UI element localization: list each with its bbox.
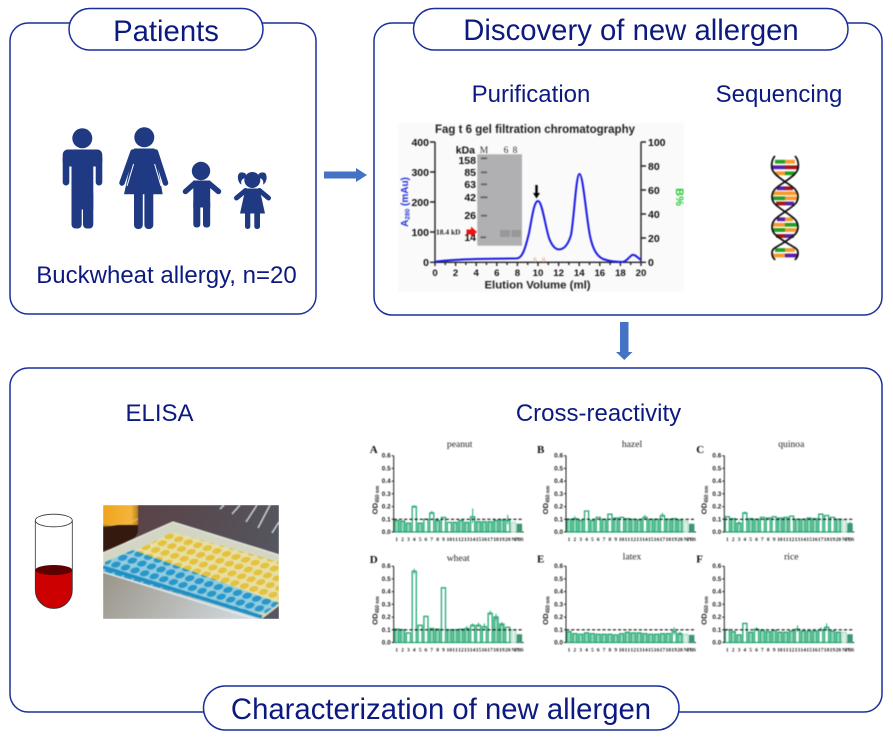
chart: E latex: 0.6 [554, 563, 563, 570]
chart: F rice: F [696, 554, 703, 566]
chart: A peanut: 0.2 [382, 504, 391, 511]
chart: gel filtration chromatography: 100 [411, 227, 429, 239]
chart: F rice: 450 nm [704, 596, 710, 613]
chart: D wheat: 1 2 3 4 5 6 7 8 9 10 11 12 13 14 15 16 17 18 19 20 N PBS [395, 648, 524, 654]
chart: F rice: 0.4 [712, 589, 722, 596]
chart: gel filtration chromatography: 42 [464, 192, 476, 204]
chart: C quinoa: OD [699, 503, 708, 514]
chart: F rice: 0.0 [712, 640, 722, 646]
chart: C quinoa: 0.1 [712, 516, 722, 523]
text: patient group: Buckwheat allergy, n=20 [36, 262, 297, 289]
panel: patients [10, 8, 316, 314]
heading: cross-reactivity: Cross-reactivity [516, 400, 681, 427]
chart: gel filtration chromatography: 400 [411, 137, 429, 149]
chart: E latex: latex [623, 552, 642, 562]
chart: gel filtration chromatography: 14 [464, 232, 476, 244]
chart: E latex: 0.5 [554, 576, 563, 583]
chart: D wheat: wheat [447, 553, 470, 564]
chart: gel filtration chromatography: 4 [474, 268, 480, 279]
chart: gel filtration chromatography: 60 [648, 185, 660, 197]
icon: family of four [63, 127, 269, 229]
chart: F rice: 0.3 [712, 601, 722, 608]
chart: C quinoa: 0.3 [712, 491, 722, 498]
chart: gel filtration chromatography: 200 [411, 197, 429, 209]
chart: E latex: 0.3 [554, 601, 563, 608]
chart: A peanut: 0.1 [382, 516, 391, 523]
chart: B hazel: 0.3 [554, 491, 563, 498]
chart: A peanut: peanut [447, 439, 473, 450]
chart: gel filtration chromatography: kDa [456, 144, 475, 156]
chart: E latex: E [537, 554, 544, 566]
heading: ELISA: ELISA [125, 400, 194, 427]
chart: B hazel: OD [541, 503, 550, 514]
chart: B hazel: 0.1 [554, 516, 563, 523]
chart: F rice: 0.5 [712, 576, 722, 583]
chart: gel filtration chromatography: (mAu) [400, 177, 411, 209]
chart: A peanut: 0.0 [382, 529, 391, 536]
chart: gel filtration chromatography: 80 [648, 161, 660, 173]
chart: gel filtration chromatography: 8 [515, 268, 521, 279]
chart: E latex [537, 552, 696, 654]
chart: E latex: 0.4 [554, 589, 563, 596]
heading: purification: Purification [472, 81, 590, 108]
chart: B hazel: 0.0 [554, 529, 563, 536]
heading: patients: Patients [113, 15, 219, 48]
heading: characterization: Characterization of new allergen [231, 693, 651, 726]
chart: B hazel: 0.4 [554, 478, 563, 485]
chart: F rice: 0.6 [712, 563, 722, 570]
chart: C quinoa: 0.6 [712, 453, 722, 460]
heading: characterization [204, 686, 679, 730]
chart: E latex: 0.0 [554, 640, 563, 646]
chart: E latex: 1 2 3 4 5 6 7 8 9 10 11 12 13 14 15 16 17 18 19 20 N PBS [568, 648, 696, 654]
chart: A peanut: 0.3 [382, 491, 391, 498]
chart: gel filtration chromatography: 85 [464, 167, 476, 179]
chart: A peanut: 0.4 [382, 478, 391, 485]
chart: gel filtration chromatography: 14 [574, 268, 585, 279]
chart: gel filtration chromatography [398, 123, 685, 292]
chart: gel filtration chromatography: 2 [453, 268, 458, 279]
chart: gel filtration chromatography: Elution Volume (ml) [484, 280, 591, 292]
chart: A peanut: OD [371, 503, 380, 514]
chart: gel filtration chromatography: M [480, 146, 489, 156]
arrow: patients to discovery [324, 168, 367, 182]
chart: gel filtration chromatography: 0 [648, 257, 654, 269]
chart: D wheat: 0.0 [382, 640, 391, 646]
chart: B hazel: 0.2 [554, 504, 563, 511]
chart: F rice: 0.2 [712, 614, 722, 621]
icon: blood test tube [35, 514, 72, 608]
chart: gel filtration chromatography: 280 [404, 208, 412, 220]
chart: D wheat: 450 nm [375, 596, 381, 613]
chart: gel filtration chromatography: 18 [615, 268, 626, 279]
chart: gel filtration chromatography: 18.4 kD [436, 228, 461, 236]
chart: gel filtration chromatography: 300 [411, 167, 429, 179]
chart: gel filtration chromatography: 8 [542, 257, 546, 264]
heading: patients [69, 8, 263, 50]
panel: characterization [10, 368, 882, 730]
chart: D wheat [370, 553, 524, 654]
chart: C quinoa: 0.0 [712, 529, 722, 536]
chart: gel filtration chromatography: 12 [553, 268, 564, 279]
chart: C quinoa: 450 nm [704, 485, 710, 503]
chart: gel filtration chromatography: 40 [648, 209, 660, 221]
chart: B hazel: hazel [622, 439, 642, 450]
heading: discovery: Discovery of new allergen [463, 14, 799, 47]
chart: F rice: rice [784, 552, 798, 562]
chart: gel filtration chromatography: 0 [423, 257, 429, 269]
chart: D wheat: OD [371, 613, 380, 625]
chart: A peanut: 0.5 [382, 465, 391, 472]
chart: D wheat: 0.4 [382, 589, 391, 596]
chart: gel filtration chromatography: 100 [648, 137, 666, 149]
chart: B hazel [537, 439, 696, 543]
chart: E latex: 450 nm [546, 596, 552, 613]
chart: gel filtration chromatography: 158 [458, 155, 476, 167]
chart: B hazel: 0.6 [554, 453, 563, 460]
chart: gel filtration chromatography: 16 [594, 268, 605, 279]
chart: D wheat: 0.2 [382, 614, 391, 621]
chart: F rice: 1 2 3 4 5 6 7 8 9 10 11 12 13 14 15 16 17 18 19 20 N PBS [726, 648, 854, 654]
chart: F rice [696, 552, 854, 654]
chart: D wheat: 0.1 [382, 627, 391, 634]
chart: gel filtration chromatography: 0 [432, 268, 438, 279]
chart: A peanut: A [370, 444, 378, 456]
chart: B hazel: 1 2 3 4 5 6 7 8 9 10 11 12 13 14 15 16 17 18 19 20 N PBS [568, 537, 696, 543]
chart: C quinoa: C [696, 444, 704, 456]
chart: B hazel: B [537, 444, 545, 456]
chart: gel filtration chromatography: Fag t 6 gel filtration chromatography [435, 124, 636, 136]
chart: B hazel: 450 nm [546, 485, 552, 503]
chart: gel filtration chromatography: 20 [636, 268, 646, 279]
chart: gel filtration chromatography: B% [673, 188, 685, 206]
arrow: discovery to characterization [616, 322, 632, 360]
chart: E latex: 0.2 [554, 614, 563, 621]
panel: discovery [374, 8, 882, 315]
chart: gel filtration chromatography: 63 [464, 179, 476, 191]
heading: sequencing: Sequencing [716, 81, 842, 108]
chart: F rice: OD [699, 613, 708, 625]
chart: E latex: OD [541, 613, 550, 625]
chart: gel filtration chromatography: 26 [464, 210, 476, 222]
chart: gel filtration chromatography: 6 [533, 257, 537, 264]
chart: gel filtration chromatography: 6 [494, 268, 499, 279]
chart: C quinoa: quinoa [778, 439, 805, 450]
chart: B hazel: 0.5 [554, 465, 563, 472]
chart: gel filtration chromatography: 8 [513, 146, 518, 156]
chart: A peanut: 0.6 [382, 453, 391, 460]
chart: D wheat: 0.5 [382, 576, 391, 583]
icon: DNA helix [772, 156, 798, 260]
chart: A peanut [370, 439, 524, 543]
chart: C quinoa: 0.5 [712, 465, 722, 472]
chart: C quinoa: 0.4 [712, 478, 722, 485]
chart: A peanut: 450 nm [375, 485, 381, 503]
chart: C quinoa: 1 2 3 4 5 6 7 8 9 10 11 12 13 14 15 16 17 18 19 20 N PBS [726, 537, 854, 543]
chart: D wheat: 0.6 [382, 563, 391, 570]
chart: D wheat: D [370, 554, 378, 566]
chart: C quinoa [696, 439, 854, 543]
chart: E latex: 0.1 [554, 627, 563, 634]
chart: gel filtration chromatography: 6 [504, 146, 509, 156]
chart: gel filtration chromatography: A [400, 220, 411, 227]
heading: discovery [414, 8, 848, 50]
chart: D wheat: 0.3 [382, 601, 391, 608]
chart: F rice: 0.1 [712, 627, 722, 634]
chart: A peanut: 1 2 3 4 5 6 7 8 9 10 11 12 13 14 15 16 17 18 19 20 N PBS [395, 537, 524, 543]
chart: C quinoa: 0.2 [712, 504, 722, 511]
photo: ELISA microplate [103, 505, 279, 619]
chart: gel filtration chromatography: 10 [533, 268, 543, 279]
chart: gel filtration chromatography: 20 [648, 233, 660, 245]
